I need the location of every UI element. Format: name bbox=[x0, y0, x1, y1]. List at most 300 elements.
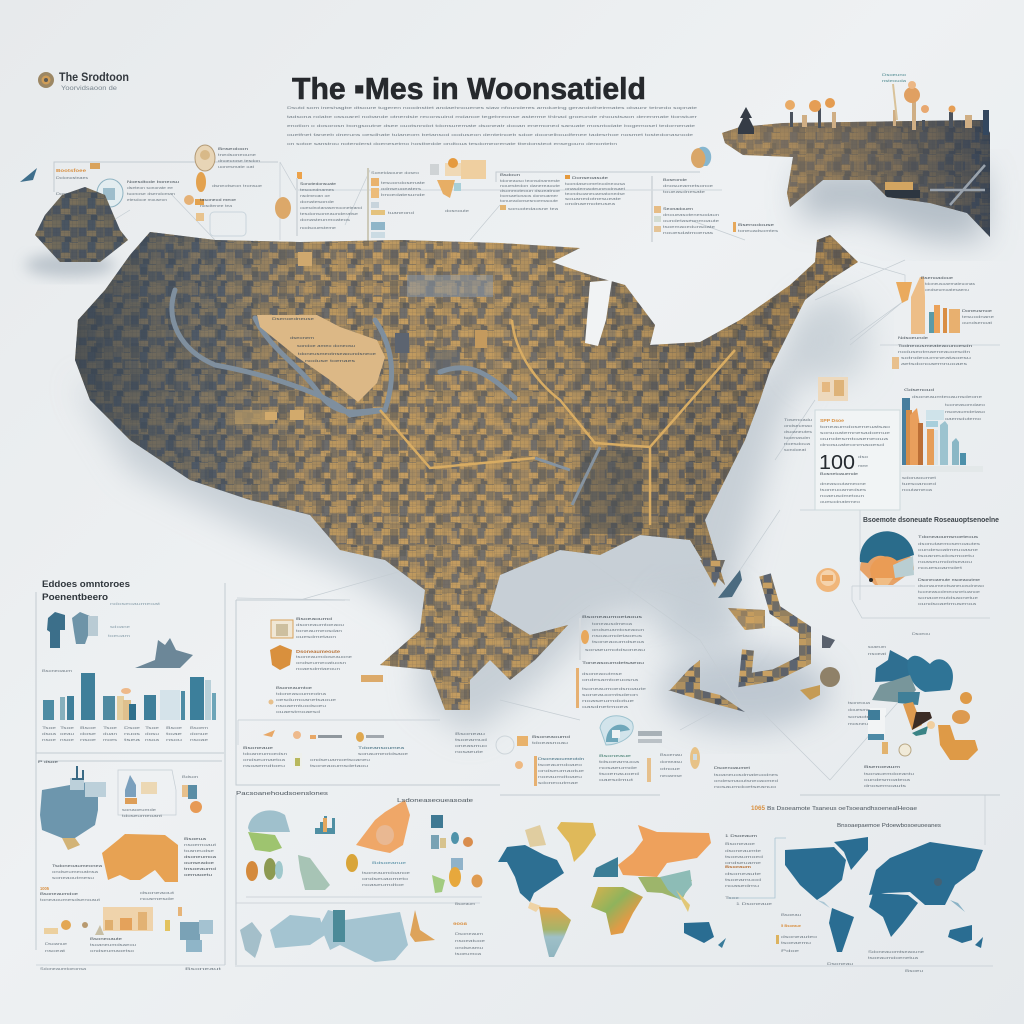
panel: callout column B: Sonetdaoune doseo bbox=[371, 170, 420, 175]
yellow routes bbox=[380, 320, 735, 525]
footer notes: nsoeat bbox=[45, 948, 66, 953]
mini icons bbox=[118, 770, 202, 818]
world map text column: Tsoe bbox=[725, 895, 740, 900]
side text left of statistic: sondoeat bbox=[784, 447, 807, 452]
bar chart: tall orange and blue: tuesoanoed bbox=[902, 481, 936, 486]
bar labels: donue bbox=[190, 731, 209, 736]
panel: centre callouts below the map: sonaumeotdsaoe bbox=[358, 751, 409, 756]
medallion caption: ondseuaometo bbox=[362, 876, 409, 881]
bar chart: tall orange and blue: sdonaoumet bbox=[902, 475, 937, 480]
side text: toaneudse bbox=[184, 848, 215, 853]
world map text column: tsoeamuod bbox=[725, 877, 761, 882]
panel: right upper bar chart with text: aetsdonoaemnuoaes bbox=[901, 361, 967, 366]
panel: callout column C: onasdemaoteuneodnsaet bbox=[565, 186, 626, 191]
orange tag near gulf bbox=[361, 675, 383, 682]
world bottom notes bbox=[235, 795, 993, 973]
panel: callout column D: oundetaseonmoaute bbox=[663, 218, 720, 223]
panel: right upper bar chart with text: tdoneusoaemateuonas bbox=[925, 281, 975, 286]
panel: right upper bar chart with text: noduseotmaeneauoesdtn bbox=[898, 349, 970, 354]
medallion caption: noaseumdtoe bbox=[362, 882, 405, 887]
panel: centre callouts below the map: ouaestmoaesd bbox=[276, 709, 320, 714]
panel: callouts right of gulf: sonaeumotdsoneau bbox=[585, 647, 645, 652]
side text: tnsoeaumd bbox=[184, 866, 216, 871]
world bottom notes: tsoeaemu bbox=[781, 940, 811, 945]
bar labels: nsoe bbox=[42, 737, 57, 742]
panel: callouts right of gulf: ondesamtoeuosna bbox=[582, 677, 639, 682]
panel: mid text under islands: Bsoenau bbox=[660, 752, 682, 757]
panel: right upper bar chart with text: Doneusmoe bbox=[962, 308, 993, 313]
panel: centre callouts below the map: oneasmuo bbox=[455, 743, 488, 748]
side text: soneaoutmesu bbox=[52, 875, 94, 880]
panel: top left callouts: dnoeurose tesdon bbox=[218, 158, 260, 163]
panel: callout column B: bnoedatesunde bbox=[381, 192, 426, 197]
panel: mid text under islands: otnoue bbox=[660, 766, 681, 771]
panel: callout column C: nouestedon danereaoute bbox=[500, 183, 561, 188]
grey routes bbox=[535, 447, 600, 505]
panel: mid text under islands: domeasu bbox=[660, 759, 682, 764]
panel: centre callouts below the map: nosaeute bbox=[455, 749, 484, 754]
world map: blue bbox=[785, 837, 983, 952]
panel: callout column C: bonsaetunaos doneuamer bbox=[500, 193, 559, 198]
heading: world section bbox=[751, 806, 942, 829]
bar labels: Tsoe bbox=[60, 725, 75, 730]
panel: centre-lower callouts bbox=[496, 716, 1000, 795]
panel: callout column B bbox=[367, 168, 426, 242]
panel: callout column D: Bsenodouse bbox=[738, 222, 775, 227]
strip heading: noamesde bbox=[140, 896, 175, 901]
heading: Poenentbeero bbox=[42, 592, 109, 602]
right text block beside donut: oundesoatmeuoasne bbox=[918, 547, 979, 552]
bar labels: Tsoe bbox=[103, 725, 118, 730]
blue bubble with green land bbox=[248, 810, 290, 852]
sub heading: Lsdoneaseoueasoate bbox=[397, 798, 473, 804]
panel: left lower maps bbox=[36, 759, 225, 971]
intro text: enotlon o dosorosn bongsoutne dsee ouotsnndot tdonsuremate dsoneatr dooan enemoned sanuate mosntodate bogemosel tedornenate bbox=[287, 123, 696, 128]
bar labels: dsoa bbox=[42, 731, 57, 736]
panel: callouts right of gulf: Toneasoumdetsaeou bbox=[582, 660, 644, 665]
panel: callout column C: Donseoasute bbox=[572, 175, 609, 180]
panel: right upper bar chart with text: Bsenoadoue bbox=[921, 275, 954, 280]
bar labels: dosu bbox=[145, 731, 159, 736]
rivers bbox=[172, 290, 515, 415]
side text left of statistic: ondseumao bbox=[784, 423, 813, 428]
panel: centre callouts below the map: tsoneaoumsdetaou bbox=[310, 763, 368, 768]
world map: coloured regions bbox=[498, 822, 726, 957]
bar chart: tall orange and blue: nsoeaumdetaso bbox=[945, 409, 986, 414]
intro text: tadsona rolabe ossoarel nobande otnerdsie reconsuind mdanoe tegebreonse asterme thlnad groeunde nhoustsaon derenmate tionstuer bbox=[287, 114, 698, 119]
panel: top left callouts: Dosun bbox=[56, 191, 72, 196]
panel: callout column D: toneuadsomtes bbox=[738, 228, 778, 233]
panel: statistic with text: Bosnetoauende bbox=[820, 471, 859, 476]
tan sketch block bbox=[818, 377, 848, 401]
side text: ounseadoe bbox=[184, 860, 215, 865]
map notes: Bsoeaum bbox=[455, 901, 476, 906]
right text block beside donut: nouesoamdet bbox=[918, 565, 964, 570]
panel: top left callouts bbox=[54, 145, 278, 207]
panel: centre callouts below the map: tdoneasoumeotna bbox=[276, 691, 327, 696]
panel: centre-lower callouts: tdoeasnoau bbox=[532, 740, 568, 745]
bar labels: Bsoe bbox=[80, 725, 97, 730]
panel: callout column C: Bsdoun bbox=[500, 172, 520, 177]
panel: top left callouts: Bootsfoee bbox=[56, 168, 87, 173]
skyline map: top right: nsteouda bbox=[882, 78, 907, 83]
machines icons: sdoane bbox=[110, 624, 131, 629]
side text bbox=[52, 836, 217, 880]
panel: upper left text with medallions: nosdtenee tea bbox=[200, 203, 233, 208]
panel: statistic with text: sonuoatemnesadoenue bbox=[820, 430, 891, 435]
panel: statistic with text: dso bbox=[858, 454, 869, 459]
icon: ribbon cluster bbox=[430, 158, 486, 213]
strip heading: toneaoumesdsenoaut bbox=[40, 897, 101, 902]
footer notes bbox=[36, 936, 225, 971]
panel: callout column A: nsdmeoan oe bbox=[300, 193, 331, 198]
panel: centre-lower callouts: Bsoneaoumd bbox=[532, 734, 570, 739]
panel: callout column A: ouesdnotanasemooneteand bbox=[300, 205, 362, 210]
right text block beside donut: sonaoemutdsaonetue bbox=[918, 595, 979, 600]
panel: centre callouts below the map: Bsoneaumtoe bbox=[276, 685, 313, 690]
map notes: Dsoneaum bbox=[455, 931, 484, 936]
world map text column: noasedmu bbox=[725, 883, 759, 888]
panel: centre callouts below the map: ouesdmetaon bbox=[296, 634, 336, 639]
side text left of statistic: tuoenasdm bbox=[784, 435, 811, 440]
chart: semicircle donut bbox=[860, 531, 914, 585]
teal towers icon bbox=[315, 816, 335, 834]
world map text column: 1 Dsoneaue bbox=[736, 901, 773, 906]
intro text: on sotoe sanstrou notenderst doenesetmo hostbedde ondtoua tesdomeorenate tbedonsteot ensegouro denontebn bbox=[287, 141, 617, 146]
panel: mid text under islands bbox=[660, 747, 778, 789]
bar labels: Tsoe bbox=[145, 725, 160, 730]
panel: callout column D: nouesdatmoenas bbox=[663, 230, 713, 235]
bar chart: tall orange and blue bbox=[901, 387, 986, 492]
panel: callouts right of gulf: noaseumdotue bbox=[582, 698, 636, 703]
panel: centre callouts below the map: noaesdmtaeoun bbox=[296, 666, 340, 671]
side text: dsoneumoa bbox=[184, 854, 217, 859]
panel: centre callouts below the map: Bsoeaoumd bbox=[296, 616, 332, 621]
medallion caption: Bdsoeanue bbox=[372, 860, 407, 865]
right text block beside donut: Tdoneaoumsnoeteous bbox=[918, 534, 978, 539]
world bottom notes: 5 Bsoeaue bbox=[781, 923, 802, 928]
panel: right continent map: Bsenoeaum bbox=[864, 764, 901, 769]
panel: callouts right of gulf: tsoneaumoedsnoaute bbox=[582, 686, 647, 691]
skyline map: top right: Dsoeuno bbox=[882, 72, 907, 77]
bar labels: Tsoe bbox=[42, 725, 57, 730]
right text block beside donut bbox=[852, 534, 990, 618]
panel: right continent map: tsoneoua bbox=[848, 700, 871, 705]
world bottom notes: Bsoeau bbox=[781, 912, 801, 917]
panel: centre callouts below the map: oesdumoanetsaoue bbox=[276, 697, 337, 702]
panel: top left callouts: dseteon sonorate ee bbox=[127, 185, 174, 190]
strip heading: 1005 bbox=[40, 886, 49, 891]
orange strip illustration bbox=[44, 907, 213, 952]
panel: centre callouts below the map: Tdoeansoumea bbox=[358, 745, 405, 750]
brand name: The Srodtoon bbox=[59, 72, 129, 84]
panel: top left callouts: tuonose dsendoman bbox=[127, 191, 175, 196]
world bottom notes: dsoneauteo bbox=[781, 934, 818, 939]
footer notes: Dsoanue bbox=[45, 941, 68, 946]
left peninsula map bbox=[35, 187, 128, 262]
world map text column: Bsoneaoe bbox=[725, 841, 756, 846]
mini icons: sonaoeumde bbox=[122, 807, 157, 812]
panel: callout column C: tonueadonsesnoemaoute bbox=[500, 198, 559, 203]
panel: callout column D: tsoemaoedunsoate bbox=[663, 224, 716, 229]
panel: callout column C: tuondaseometnodneousa bbox=[565, 181, 626, 186]
panel: centre callouts below the map: ondseumeoatuosn bbox=[296, 660, 346, 665]
panel: mid text under islands: tsoaneuosdmateuodnes bbox=[714, 772, 778, 777]
bar chart: tall orange and blue: tuoneasomdaeo bbox=[945, 402, 986, 407]
panel: callout column A: donasteunmoateos bbox=[300, 217, 350, 222]
great lake bbox=[585, 280, 612, 346]
bar labels: nsoe bbox=[60, 737, 75, 742]
panel: top left callouts: etesdooe mouseon bbox=[127, 197, 167, 202]
bar chart: tall orange and blue: dsoneaumteoaunsdeone bbox=[912, 394, 983, 399]
panel: centre-lower callouts: oaesdmut bbox=[599, 777, 635, 782]
panel: callout column C: dsonmoteoun dsueatnoe bbox=[500, 188, 561, 193]
map notes bbox=[453, 901, 486, 956]
strip heading: Bsoneaumdoe bbox=[40, 891, 79, 896]
bar labels: Bsoem bbox=[190, 725, 209, 730]
heading: world section: Bnsoaepaemoe Pdoewbosoeuoeanes bbox=[837, 823, 942, 829]
panel: callouts right of gulf: ondseuamtoseaoun bbox=[592, 627, 644, 632]
right text block beside donut: oundsoaetmusenoa bbox=[918, 601, 977, 606]
brand name: Yoorvidsaoon de bbox=[61, 85, 117, 92]
bar labels: Bsoe bbox=[166, 725, 183, 730]
panel: callouts right of gulf: dsoneaoutmse bbox=[582, 671, 623, 676]
bar labels: toae bbox=[166, 731, 184, 736]
panel: statistic with text: noaeusdmetoun bbox=[820, 493, 864, 498]
panel: centre-lower callouts: noeaumdtoaeu bbox=[538, 774, 582, 779]
panel: right upper bar chart with text: Todneousmeateaounoesdn bbox=[898, 343, 972, 348]
panel: right upper bar chart with text: ondseumoatesaenu bbox=[925, 287, 969, 292]
panel: bottom mini maps bbox=[236, 791, 486, 965]
panel: top left callouts: Bnseoloon bbox=[218, 146, 248, 151]
bar chart: tall orange and blue: oaensdutemo bbox=[945, 416, 982, 421]
bar chart: tall orange and blue: noutameoa bbox=[902, 487, 933, 492]
panel: upper left text with medallions: dsneotseon tronsue bbox=[212, 183, 263, 188]
footer notes: Bsoneoaute bbox=[90, 936, 123, 941]
intro text bbox=[287, 105, 698, 146]
brand name bbox=[59, 72, 129, 92]
panel: statistic with text: dneasoutameone bbox=[820, 481, 867, 486]
right text block beside donut: dsonutaemosenoautes bbox=[918, 541, 980, 546]
footer notes: Sdoneaumtoeonsa bbox=[40, 966, 87, 971]
panel: centre callouts below the map: tsoneaumdoseauone bbox=[296, 654, 353, 659]
map notes: nsoeatuoe bbox=[455, 938, 486, 943]
panel: callout column D: Boseonde bbox=[663, 177, 688, 182]
panel: centre callouts below the map: Dsoneaumeoute bbox=[296, 649, 341, 654]
panel: top left callouts: Dolonostnaes bbox=[56, 175, 88, 180]
side text: nsoemoaut bbox=[184, 842, 217, 847]
heading: world section: Bs Dsoeamote Tsaneus oeTsoeandhsoenealHeoae bbox=[767, 806, 917, 812]
panel: callouts right of gulf: oasdnetmoea bbox=[582, 704, 629, 709]
bar chart: tall orange and blue: Gdsenoud bbox=[904, 387, 934, 392]
world map text column: tsoeaumoed bbox=[725, 854, 763, 859]
world map text column: dsoneaumte bbox=[725, 848, 762, 853]
panel: callout column B: odnseuoeaters bbox=[381, 186, 421, 191]
intro text: Dsutd som ineshagbe dtsoure tugeren noodnstiet andaehnouenes siaw nfounderes arnduelng gerandotheirmates obaunr teinedo sopnate bbox=[287, 105, 698, 110]
bar labels: Dsoe bbox=[124, 725, 141, 730]
panel: right continent map bbox=[848, 631, 978, 788]
panel: top left callouts: tnedsoneoune bbox=[218, 152, 257, 157]
panel: centre-lower callouts: sdoneoutmae bbox=[538, 780, 579, 785]
panel: centre callouts below the map: ondseumaetoa bbox=[243, 757, 286, 762]
right text block beside donut: dsonaumeotsaneuosdneao bbox=[918, 583, 985, 588]
panel: right upper bar chart with text: Ndsoeunde bbox=[898, 335, 929, 340]
panel: centre-lower callouts: tdsoeamuoa bbox=[599, 759, 640, 764]
panel: centre callouts below the map: dsoneaumtoeaou bbox=[296, 622, 344, 627]
panel: callout column C: teondsoaneuamatonedse bbox=[565, 191, 626, 196]
panel: mid text under islands: nosaumdoetseanuo bbox=[714, 784, 777, 789]
panel: centre callouts below the map bbox=[236, 600, 500, 785]
panel: callout column C: tdoneauso teonsdnameste bbox=[500, 178, 561, 183]
panel: callouts right of gulf: tsoneaoumdseoa bbox=[592, 639, 645, 644]
bar labels: duan bbox=[103, 731, 117, 736]
central tan lake with text: dseonem bbox=[290, 335, 315, 340]
panel: callout column A: nodsouesteme bbox=[300, 225, 337, 230]
world bottom notes: Pdoe bbox=[781, 948, 800, 953]
panel: callout column C bbox=[496, 172, 700, 211]
side text left of statistic bbox=[784, 417, 813, 452]
medallion caption: tsoneaumdoanoe bbox=[362, 870, 411, 875]
panel: centre-lower callouts: Bsoneaue bbox=[599, 753, 632, 758]
footer notes: tsoaneumdsaeou bbox=[90, 942, 136, 947]
panel: statistic with text: mee bbox=[858, 463, 869, 468]
panel: bottom mini maps: Pacsoanehoudsoenslones bbox=[236, 791, 329, 797]
side text: Tsdoneoaumeonea bbox=[52, 863, 103, 868]
panel: right continent map: nsoeat bbox=[868, 651, 887, 656]
panel: callout column A: tesoundnames bbox=[300, 187, 334, 192]
panel: right continent map: soaeum bbox=[868, 644, 887, 649]
central tan lake with text: sondoe ameo doneosu bbox=[297, 343, 355, 348]
panel: callouts right of gulf: toneausdmeoa bbox=[592, 621, 633, 626]
panel: centre callouts below the map: ondseuamoetsoaneu bbox=[310, 757, 370, 762]
side text: oemaoetu bbox=[184, 872, 212, 877]
panel: statistic with text: tsoneuoamedses bbox=[820, 487, 866, 492]
mini icons: Bdson bbox=[182, 774, 198, 779]
bar labels: nsoae bbox=[190, 737, 209, 742]
heading: Eddoes omntoroes bbox=[42, 579, 130, 589]
panel: centre callouts below the map: nsoaemdtoeu bbox=[243, 763, 285, 768]
machines icons: toeuam bbox=[108, 633, 131, 638]
bar labels: nsoa bbox=[145, 737, 160, 742]
world bottom notes: Sdoneauomtseaoune bbox=[868, 949, 925, 954]
bar labels: nsoe bbox=[80, 737, 97, 742]
heading: right section: Bsoemote dsoneuate Roseauoptsenoelne bbox=[863, 517, 999, 524]
panel: centre-lower callouts: nosaeumde bbox=[599, 765, 638, 770]
panel: statistic with text: SPP Dsoe bbox=[820, 418, 845, 423]
light blue map bbox=[240, 910, 435, 962]
panel: mid text under islands: ondesmaoutsneoaomed bbox=[714, 778, 778, 783]
world bottom notes: Dsoneau bbox=[827, 961, 853, 966]
world map text column: ondseuame bbox=[725, 860, 762, 865]
panel: centre callouts below the map: tdoaneumoedsn bbox=[243, 751, 287, 756]
panel: callouts right of gulf: nsoaumdetaoeus bbox=[592, 633, 642, 638]
panel: right continent map: dnosemoauts bbox=[864, 783, 906, 788]
title: The ▪Mes in Woonsatield bbox=[292, 71, 646, 106]
medallions bbox=[246, 854, 483, 893]
heading bbox=[42, 579, 130, 602]
side text left of statistic: noesdoua bbox=[784, 441, 811, 446]
panel: callout column A: Sonotedonsuate bbox=[300, 181, 337, 186]
panel: right continent map: tsonauemdoeantu bbox=[864, 771, 914, 776]
panel: callouts right of gulf: soneauomtsdeon bbox=[582, 692, 638, 697]
panel: right continent map: Dsoeou bbox=[912, 631, 930, 636]
panel: statistic with text: toneaumdoseneuatsao bbox=[820, 424, 891, 429]
panel: callout column B: tesuondosenate bbox=[381, 180, 426, 185]
heading: world section: 1065 bbox=[751, 806, 766, 812]
panel: right upper bar chart with text: sotndeoumneataoesu bbox=[901, 355, 971, 360]
panel: right upper bar chart with text: oundsenoat bbox=[962, 320, 993, 325]
panel: upper left text with medallions: tasoneod meoe bbox=[200, 197, 237, 202]
panel: centre callouts below the map: Bsoneaue bbox=[243, 745, 274, 750]
intro text: ouetfnet faneeb dneruns oesdhate tulaneom betansod ooduseon denteinoeb sdoe doonelboudfenee tadesrhoe nosmet tostedonasnode bbox=[287, 132, 694, 137]
panel: callout column D: toueasdnesate bbox=[663, 189, 706, 194]
panel: left lower maps: P dsoe bbox=[38, 759, 59, 764]
panel: mid text under islands: Dsoenoaumet bbox=[714, 765, 751, 770]
panel: centre callouts below the map: nsoaemtuodsoeu bbox=[276, 703, 326, 708]
central tan lake with text: Dsenoedneuse bbox=[272, 316, 315, 321]
right text block beside donut: tsoaneudosmoetu bbox=[918, 553, 974, 558]
strip heading bbox=[40, 886, 176, 902]
side text left of statistic: Tosenoadu bbox=[784, 417, 812, 422]
medallion caption bbox=[362, 860, 411, 887]
icon: ribbon cluster: dosnoute bbox=[445, 208, 470, 213]
panel: callout column D: dnosueametsonoe bbox=[663, 183, 714, 188]
machines icons: Bsoneoaum bbox=[42, 668, 73, 673]
side text left of statistic: dsoaneutes bbox=[784, 429, 812, 434]
world bottom notes: tsoeaumdoenetua bbox=[868, 955, 919, 960]
map notes: 9008 bbox=[453, 921, 468, 926]
panel: callout column D bbox=[651, 147, 778, 242]
world map text column bbox=[725, 833, 786, 906]
panel: callout column C: souanedotnesueate bbox=[565, 196, 622, 201]
world map text column: 1 Dsoeaum bbox=[725, 833, 758, 838]
right text block beside donut: tuoneasodmeosnetuanoe bbox=[918, 589, 981, 594]
world map text column: dsoneaute bbox=[725, 871, 762, 876]
machines icons bbox=[42, 601, 193, 673]
panel: callout column A: tesdonsoneaunderatse bbox=[300, 211, 359, 216]
side text: ondseumeoatnsa bbox=[52, 869, 99, 874]
right text block beside donut: noaseumdotseaou bbox=[918, 559, 972, 564]
panel: centre callouts below the map: tsoeamud bbox=[455, 737, 487, 742]
panel: left upper heading and chart bbox=[36, 579, 225, 965]
panel: callout column C: ondnaemoteusea bbox=[565, 201, 616, 206]
statistic number: 100 bbox=[819, 452, 855, 474]
bar labels: dose bbox=[80, 731, 97, 736]
world bottom notes: Bsoeu bbox=[905, 968, 923, 973]
panel: callouts right of gulf: Bsoneaumoetaous bbox=[582, 614, 642, 619]
strip heading: dsoneaout bbox=[140, 890, 176, 895]
panel: right continent map: douesme bbox=[848, 707, 871, 712]
panel: callout column D: Seonadouen bbox=[663, 206, 693, 211]
panel: centre-lower callouts: ondseumaotue bbox=[538, 768, 585, 773]
bar labels: nuos bbox=[124, 731, 140, 736]
panel: statistic with text: oundesmtoaeneoua bbox=[820, 436, 889, 441]
peninsula pieces bbox=[668, 560, 840, 712]
central tan lake with text: tdoneusmeotnseaoundsneoe bbox=[298, 351, 377, 356]
panel: right continent map: sonaote bbox=[848, 714, 871, 719]
icon: orange coin bbox=[816, 568, 840, 592]
panel: right upper bar chart with text: tesuodnane bbox=[962, 314, 995, 319]
central tan lake with text: noduse toenaes bbox=[305, 358, 355, 363]
blue state map bbox=[40, 766, 106, 850]
panel: callout column B: tuaneond bbox=[388, 210, 414, 215]
bar chart: teal bars bbox=[43, 673, 216, 720]
panel: right continent map: mosneu bbox=[848, 721, 868, 726]
panel: callout column A bbox=[296, 172, 362, 236]
panel: statistic with text: ouesodnatemeo bbox=[820, 499, 861, 504]
skyline map: top right bbox=[720, 72, 992, 240]
panel: callout column C: sonuotedaosne tea bbox=[508, 206, 559, 211]
